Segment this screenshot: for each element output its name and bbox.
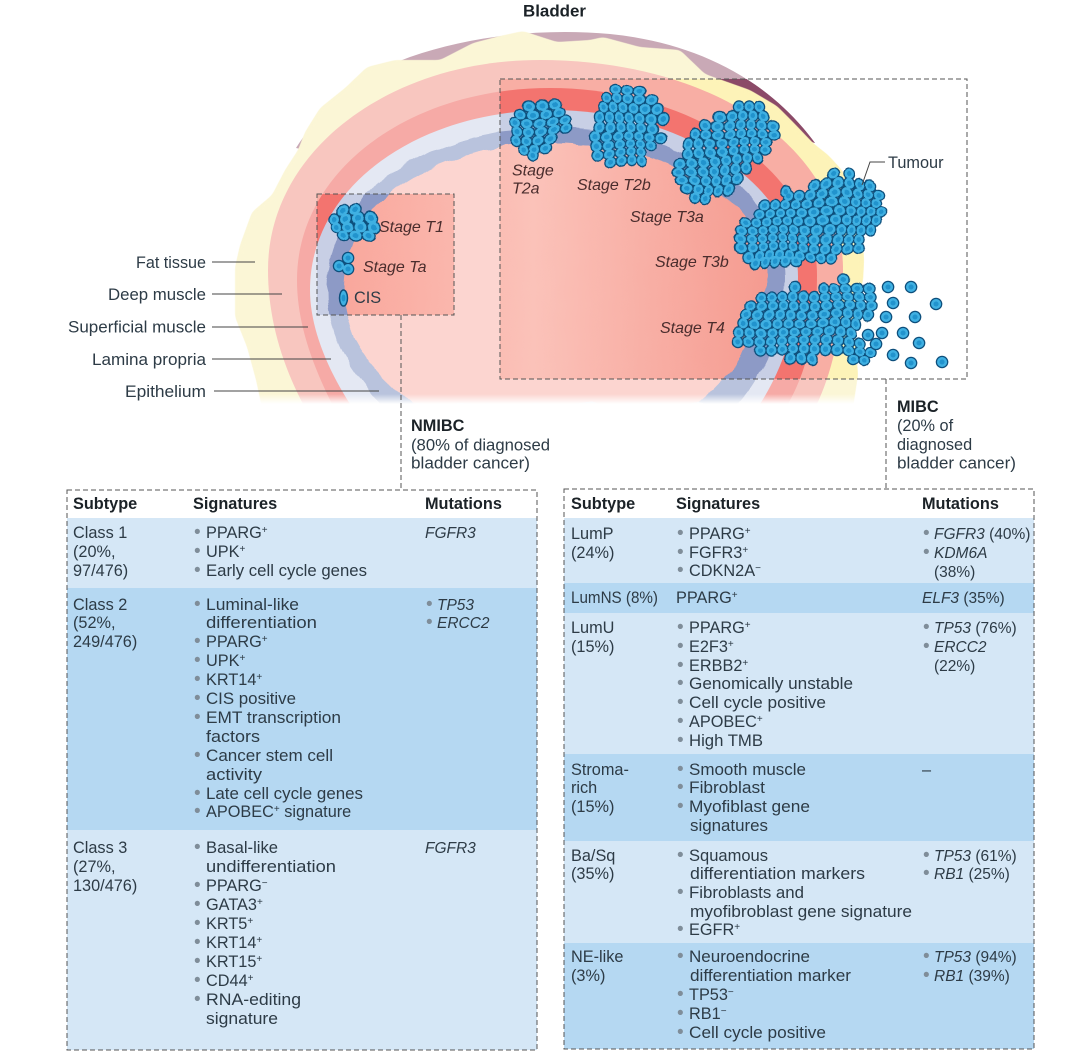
row: LumP <box>571 523 1030 581</box>
row: Class 3 <box>73 837 476 1028</box>
row: LumP: (24%) <box>571 544 614 562</box>
row: Class 3: GATA3 <box>206 896 257 914</box>
row: Class 3: FGFR3 <box>425 840 476 857</box>
row: Class 2: Luminal-like <box>206 596 299 614</box>
table border <box>67 490 537 1050</box>
row: LumP: (38%) <box>934 564 975 581</box>
row: Class 2: • <box>194 707 201 728</box>
layer: fat tissue <box>235 31 864 408</box>
layer labels with leader lines: Deep muscle <box>108 286 206 304</box>
row: LumP: • <box>923 523 930 544</box>
row: Class 2: + <box>256 672 262 683</box>
row: LumP: LumP <box>571 525 614 543</box>
row: Class 2: • <box>426 594 433 615</box>
layer: epithelium <box>327 128 785 404</box>
row: LumNS: PPARG <box>676 589 732 607</box>
heading: Bladder: Bladder <box>523 2 587 20</box>
row: Class 1 <box>73 522 476 581</box>
row: LumU: • <box>677 692 684 713</box>
row: Class 3: signature <box>206 1010 278 1028</box>
row: LumU: + <box>757 714 763 725</box>
row: LumU: ERCC2 <box>934 639 987 656</box>
row: Class 3: • <box>194 913 201 934</box>
tumour cells: Stage T2b <box>595 91 664 163</box>
row: Class 3: CD44 <box>206 972 248 990</box>
row: Ba/Sq: + <box>734 922 740 933</box>
row: Ba/Sq: TP53 <box>934 848 971 865</box>
row: Class 1: UPK <box>206 543 240 561</box>
row: LumU: • <box>677 655 684 676</box>
row: Stroma-rich: signatures <box>690 817 768 835</box>
row: LumU: PPARG <box>689 619 745 637</box>
caption: NMIBC: bladder cancer) <box>411 454 530 472</box>
row: LumP: + <box>745 526 751 537</box>
row: Class 2: UPK <box>206 652 240 670</box>
label with leader: Tumour: Tumour <box>888 154 944 172</box>
row backgrounds <box>67 518 537 1050</box>
row: Class 2: signature <box>280 803 351 821</box>
row: Class 2: 249/476) <box>73 633 137 651</box>
tumour cells: Stage T3b <box>738 176 882 263</box>
stage labels <box>354 162 729 337</box>
header row: Subtype <box>73 495 137 513</box>
row: LumU: • <box>677 636 684 657</box>
row: Ba/Sq: Fibroblasts and <box>689 884 804 902</box>
header row: Mutations <box>425 495 502 513</box>
row: NE-like: • <box>677 946 684 967</box>
row: Stroma-rich: Stroma- <box>571 761 629 779</box>
row: Ba/Sq: Ba/Sq <box>571 847 615 865</box>
row: Class 1: Class 1 <box>73 524 127 542</box>
row: Class 2: • <box>194 594 201 615</box>
row: LumP: FGFR3 <box>934 526 985 543</box>
row: Class 2: + <box>262 634 268 645</box>
row: Class 2: Late cell cycle genes <box>206 785 363 803</box>
row: Class 3: PPARG <box>206 877 262 895</box>
row: Class 3: + <box>257 897 263 908</box>
row: Class 3: Class 3 <box>73 839 127 857</box>
row: Ba/Sq: RB1 <box>934 866 964 883</box>
row: Ba/Sq: • <box>923 845 930 866</box>
tumour cells: Stage T4 <box>738 278 872 360</box>
caption: MIBC: MIBC <box>897 398 939 416</box>
row: LumU: (15%) <box>571 638 614 656</box>
row: LumU: ERBB2 <box>689 657 742 675</box>
row: Ba/Sq: • <box>923 863 930 884</box>
row: Class 2: • <box>194 631 201 652</box>
row: Class 2: Class 2 <box>73 596 127 614</box>
header row: Mutations <box>922 495 999 513</box>
row: Class 3: − <box>262 878 268 889</box>
row: Ba/Sq: • <box>677 882 684 903</box>
row: NE-like: Neuroendocrine <box>689 948 810 966</box>
row: NE-like: • <box>923 946 930 967</box>
table: NMIBC subtypes <box>67 490 537 1050</box>
row: Class 3: • <box>194 875 201 896</box>
row: Class 3: (27%, <box>73 858 116 876</box>
row: NE-like: RB1 <box>934 968 964 985</box>
row: Ba/Sq: (35%) <box>571 865 614 883</box>
row: LumU: • <box>677 673 684 694</box>
row: Class 2: • <box>194 669 201 690</box>
row: Class 3: KRT14 <box>206 934 256 952</box>
row: LumNS <box>571 589 1005 607</box>
row: NE-like: (3%) <box>571 967 605 985</box>
bladder wall cross-section <box>220 31 880 410</box>
row: NE-like: differentiation marker <box>690 967 852 985</box>
row: Class 3: Basal-like <box>206 839 278 857</box>
row: Class 3: • <box>194 951 201 972</box>
row: Class 1: + <box>239 544 245 555</box>
row: LumU: High TMB <box>689 732 763 750</box>
tumour cells: scattered metastatic cells <box>868 287 942 363</box>
layer labels with leader lines: Lamina propria <box>92 351 207 369</box>
row: Stroma-rich: Fibroblast <box>689 779 765 797</box>
row: Stroma-rich: rich <box>571 779 597 797</box>
row: Ba/Sq: (61%) <box>971 848 1017 865</box>
row: LumP: • <box>677 560 684 581</box>
header row <box>571 495 999 513</box>
row: Stroma-rich: • <box>677 777 684 798</box>
dashed box: NMIBC stages <box>317 194 454 315</box>
caption: NMIBC <box>411 417 550 472</box>
row: NE-like: (94%) <box>971 949 1017 966</box>
row: NE-like: • <box>677 1003 684 1024</box>
row: Class 1: 97/476) <box>73 562 128 580</box>
caption: MIBC: diagnosed <box>897 436 972 454</box>
row: Stroma-rich: – <box>922 761 932 779</box>
row: Class 2: APOBEC <box>206 803 274 821</box>
row: Stroma-rich: (15%) <box>571 798 614 816</box>
row: LumU: • <box>677 711 684 732</box>
stage labels: Stage T3b <box>655 254 729 271</box>
row: Ba/Sq: Squamous <box>689 847 768 865</box>
row: Class 1: FGFR3 <box>425 525 476 542</box>
row: Class 3: 130/476) <box>73 877 137 895</box>
row: Class 2: PPARG <box>206 633 262 651</box>
layer labels with leader lines <box>68 254 379 401</box>
row: LumU: (22%) <box>934 658 975 675</box>
row: NE-like: − <box>721 1006 727 1017</box>
stage labels: Stage T4 <box>660 320 725 337</box>
row: Class 1: • <box>194 541 201 562</box>
row: Class 2: + <box>239 653 245 664</box>
row: Class 3: + <box>247 916 253 927</box>
row: Class 1: Early cell cycle genes <box>206 562 367 580</box>
row: Class 3: + <box>256 935 262 946</box>
row: LumU <box>571 617 1017 751</box>
tumour cell: CIS <box>340 290 348 306</box>
row: Stroma-rich: • <box>677 759 684 780</box>
stage labels: Stage T3a <box>630 209 704 226</box>
layer: lamina propria <box>310 110 798 404</box>
row: NE-like: • <box>677 1022 684 1043</box>
row: LumP: • <box>677 523 684 544</box>
row: Stroma-rich: Myofiblast gene <box>689 798 810 816</box>
row: Class 1: PPARG <box>206 524 262 542</box>
row: LumP: + <box>742 545 748 556</box>
row: Class 2: activity <box>206 766 263 784</box>
row: Class 3: undifferentiation <box>206 858 336 876</box>
tumour cells: Stage T3a <box>680 108 775 197</box>
layer: outer serosa <box>296 32 815 200</box>
row: Ba/Sq: • <box>677 919 684 940</box>
row: LumU: TP53 <box>934 620 971 637</box>
row: Class 1: (20%, <box>73 543 116 561</box>
row: Class 2: ERCC2 <box>437 615 490 632</box>
row: LumU: (76%) <box>971 620 1017 637</box>
layer labels with leader lines: Epithelium <box>125 383 206 401</box>
row: LumP: CDKN2A <box>689 562 755 580</box>
row: LumU: + <box>742 658 748 669</box>
connector: MIBC box to table <box>885 379 887 488</box>
highlighted staging regions <box>317 79 864 379</box>
stage labels: CIS <box>354 289 381 307</box>
row: LumNS: + <box>732 590 738 601</box>
row: Class 3: • <box>194 970 201 991</box>
row: Class 2: • <box>194 801 201 822</box>
row: Ba/Sq: • <box>677 845 684 866</box>
row: LumU: • <box>677 617 684 638</box>
table border <box>564 489 1034 1049</box>
row: LumP: • <box>923 542 930 563</box>
row: LumU: • <box>923 636 930 657</box>
row: Stroma-rich <box>571 759 932 835</box>
row: LumU: • <box>677 730 684 751</box>
caption: MIBC <box>897 398 1016 472</box>
row: LumNS: LumNS (8%) <box>571 589 658 607</box>
label with leader: Tumour <box>862 154 944 185</box>
row: Class 2: EMT transcription <box>206 709 341 727</box>
row: LumP: FGFR3 <box>689 544 742 562</box>
layer: superficial muscle <box>297 88 817 404</box>
row: Class 3: • <box>194 989 201 1010</box>
row: LumU: LumU <box>571 619 614 637</box>
row: Class 2 <box>73 594 490 822</box>
row: Stroma-rich: • <box>677 796 684 817</box>
row: LumU: Cell cycle positive <box>689 694 826 712</box>
row: Class 3: KRT15 <box>206 953 256 971</box>
row: NE-like: Cell cycle positive <box>689 1024 826 1042</box>
row: NE-like: (39%) <box>964 968 1010 985</box>
row: LumU: + <box>728 639 734 650</box>
row: LumNS: ELF3 (35%) <box>922 590 1005 607</box>
layer labels with leader lines: Superficial muscle <box>68 318 206 336</box>
row: Class 2: differentiation <box>206 614 317 632</box>
row: Ba/Sq <box>571 845 1017 940</box>
row: LumP: PPARG <box>689 525 745 543</box>
stage labels: Stage T2b <box>577 177 651 194</box>
caption: MIBC: bladder cancer) <box>897 454 1016 472</box>
row: Class 3: RNA-editing <box>206 991 301 1009</box>
row: Class 3: • <box>194 894 201 915</box>
row backgrounds <box>564 518 1034 1049</box>
header row: Subtype <box>571 495 635 513</box>
stage labels: Stage <box>512 162 554 180</box>
caption: NMIBC: (80% of diagnosed <box>411 436 550 454</box>
row: Class 2: factors <box>206 728 260 746</box>
caption: MIBC: (20% of <box>897 417 954 435</box>
row: Ba/Sq: EGFR <box>689 921 734 939</box>
row: Class 2: • <box>426 612 433 633</box>
row: Class 2: CIS positive <box>206 690 296 708</box>
stage labels: T2a <box>512 180 540 198</box>
connector: NMIBC box to table <box>400 315 402 490</box>
row: Class 2: • <box>194 783 201 804</box>
row: Class 2: KRT14 <box>206 671 256 689</box>
row: LumP: KDM6A <box>934 545 987 562</box>
row: Ba/Sq: myofibroblast gene signature <box>690 903 912 921</box>
row: NE-like: • <box>923 965 930 986</box>
row: Class 3: + <box>256 954 262 965</box>
table: MIBC subtypes <box>564 489 1034 1049</box>
layer labels with leader lines: Fat tissue <box>136 254 206 272</box>
layer: deep muscle <box>268 60 843 404</box>
row: LumP: • <box>677 542 684 563</box>
row: Class 1: • <box>194 522 201 543</box>
tumour cells: Stage T1 <box>337 211 373 235</box>
row: Class 1: • <box>194 560 201 581</box>
row: Class 3: KRT5 <box>206 915 247 933</box>
row: Class 3: • <box>194 932 201 953</box>
row: Class 2: Cancer stem cell <box>206 747 333 765</box>
row: NE-like: TP53 <box>689 986 728 1004</box>
row: Class 3: • <box>194 837 201 858</box>
row: NE-like <box>571 946 1017 1043</box>
row: LumU: Genomically unstable <box>689 675 853 693</box>
row: Class 2: (52%, <box>73 614 116 632</box>
row: LumU: • <box>923 617 930 638</box>
row: LumP: (40%) <box>985 526 1030 543</box>
header row: Signatures <box>676 495 760 513</box>
header row: Signatures <box>193 495 277 513</box>
row: Class 2: • <box>194 650 201 671</box>
row: LumU: E2F3 <box>689 638 728 656</box>
row: Class 1: + <box>262 525 268 536</box>
dashed box: MIBC stages <box>500 79 967 379</box>
row: LumU: APOBEC <box>689 713 757 731</box>
row: NE-like: RB1 <box>689 1005 721 1023</box>
row: NE-like: − <box>728 987 734 998</box>
row: Class 2: • <box>194 745 201 766</box>
row: NE-like: NE-like <box>571 948 623 966</box>
row: NE-like: TP53 <box>934 949 971 966</box>
row: Ba/Sq: (25%) <box>964 866 1010 883</box>
row: Class 3: + <box>248 973 254 984</box>
row: Stroma-rich: Smooth muscle <box>689 761 806 779</box>
row: Ba/Sq: differentiation markers <box>690 865 865 883</box>
tumour cells: Stage T2a <box>517 104 564 155</box>
row: Class 2: + <box>274 804 280 815</box>
tumour cells: Stage Ta <box>339 258 348 269</box>
stage labels: Stage T1 <box>379 219 444 236</box>
header row <box>73 495 502 513</box>
caption: NMIBC: NMIBC <box>411 417 465 435</box>
row: Class 2: TP53 <box>437 597 474 614</box>
row: LumU: + <box>745 620 751 631</box>
row: LumP: − <box>755 563 761 574</box>
row: NE-like: • <box>677 984 684 1005</box>
layer: bladder lumen <box>343 143 767 404</box>
row: Class 2: • <box>194 688 201 709</box>
stage labels: Stage Ta <box>363 259 427 276</box>
